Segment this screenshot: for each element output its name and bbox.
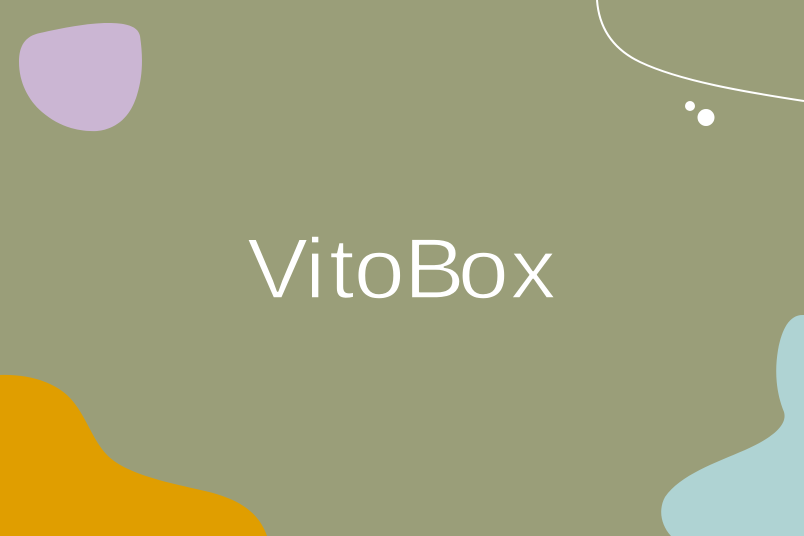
small white dot [685, 101, 695, 111]
lilac blob [19, 23, 142, 131]
orange blob [0, 375, 267, 536]
title: VitoBox [247, 221, 556, 316]
thin white curve [597, 0, 804, 101]
light blue blob [661, 315, 804, 536]
large white dot [698, 109, 714, 126]
